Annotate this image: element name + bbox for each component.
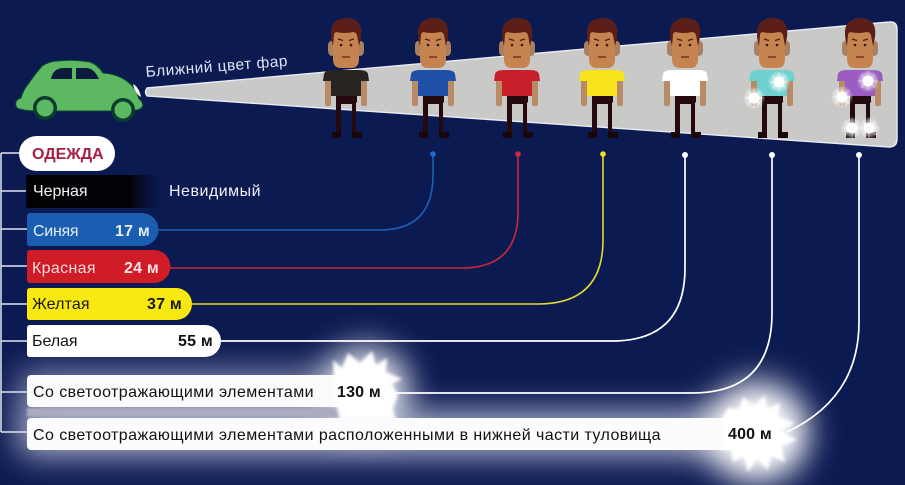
row: reflective elements: 130 м [337, 384, 381, 401]
person: white shirt [662, 18, 708, 138]
row: red: 24 м [124, 260, 159, 277]
row: red: Красная [32, 260, 96, 277]
connector: red [170, 151, 521, 268]
left bracket stubs [1, 153, 27, 432]
person: purple shirt with reflectors [832, 18, 883, 138]
row: blue: 17 м [115, 223, 150, 240]
connector: reflective lower [787, 152, 862, 432]
row: black [26, 175, 261, 208]
row: white [27, 325, 221, 357]
glow behind reflective bars [20, 346, 807, 482]
connector: yellow [192, 151, 606, 304]
person: black shirt [323, 18, 369, 138]
row: blue [27, 213, 158, 246]
connector: white [221, 152, 688, 341]
row: reflective elements [27, 351, 402, 420]
row: black: Невидимый [169, 183, 261, 200]
person: yellow shirt [579, 18, 625, 138]
row: reflective lower torso [27, 395, 797, 472]
heading: clothing pill: ОДЕЖДА [32, 146, 104, 163]
row: yellow: 37 м [147, 296, 182, 313]
headlight beam [146, 22, 897, 147]
beam label: Ближний цвет фар [145, 53, 289, 81]
row: white: Белая [32, 333, 78, 350]
heading: clothing pill [19, 136, 115, 171]
connector: blue [158, 151, 436, 230]
row: yellow: Желтая [32, 296, 90, 313]
row: reflective lower torso: Со светоотражающими элементами расположенными в нижней части туловища [33, 427, 661, 444]
row: yellow [27, 288, 192, 320]
row: white: 55 м [178, 333, 213, 350]
icon: car [16, 60, 143, 122]
row: reflective elements: Со светоотражающими элементами [33, 384, 314, 401]
person: teal shirt with reflectors [744, 18, 795, 138]
row: reflective lower torso: 400 м [728, 426, 772, 443]
connector: reflective torso [395, 152, 775, 393]
row: blue: Синяя [33, 223, 79, 240]
row: red [27, 250, 171, 283]
person: blue shirt [410, 18, 456, 138]
row: black: Черная [33, 183, 88, 200]
person: red shirt [494, 18, 540, 138]
